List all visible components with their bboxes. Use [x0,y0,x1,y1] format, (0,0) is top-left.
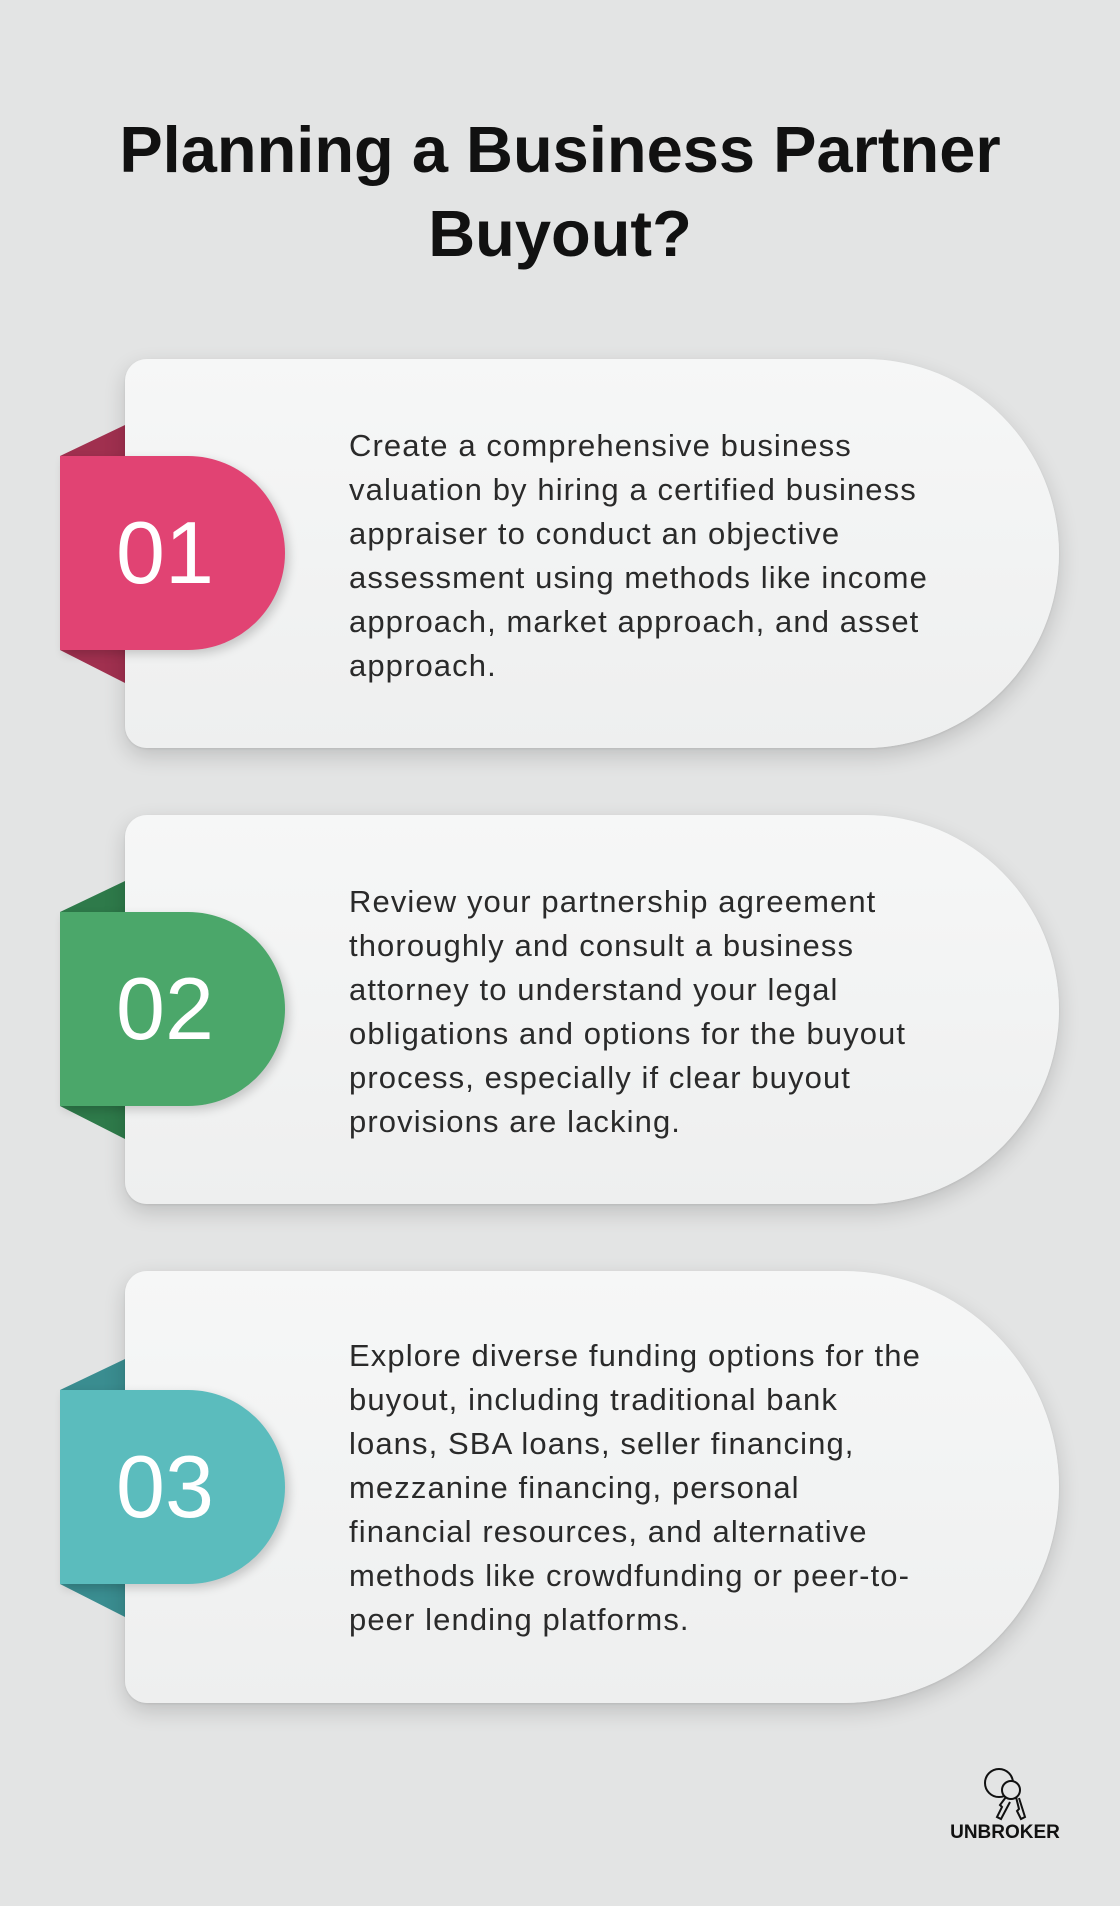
text: step 3: mezzanine financing, personal [349,1470,800,1505]
panel: step 3 [60,1270,1067,1720]
panel: step 2 [60,814,1067,1220]
card: step 3 [125,1271,1059,1703]
text: step 2: obligations and options for the buyout [349,1016,906,1051]
text: step 2: thoroughly and consult a business [349,928,854,963]
icon: keys [984,1768,1026,1820]
logo: unbroker [950,1768,1060,1843]
title: Planning a Business Partner [119,113,1001,186]
badge: 01: 01 [116,503,214,602]
text: step 1: valuation by hiring a certified business [349,472,917,507]
text: step 2: process, especially if clear buyout [349,1060,851,1095]
text: step 3: financial resources, and alternative [349,1514,868,1549]
text: step 3: Explore diverse funding options for the [349,1338,921,1373]
text: step 2 [349,884,906,1139]
text: step 3: peer lending platforms. [349,1602,690,1637]
fold: step 2 [60,881,125,1139]
text: step 1: approach. [349,648,497,683]
badge: 01 [60,456,285,650]
title [119,113,1001,270]
fold: step 3 [60,1359,125,1617]
badge: 03 [60,1390,285,1584]
text: step 1: appraiser to conduct an objective [349,516,840,551]
text: step 1: approach, market approach, and asset [349,604,919,639]
card: step 1 [125,359,1059,748]
fold: step 1 [60,425,125,683]
badge: 03: 03 [116,1437,214,1536]
text: step 2: Review your partnership agreement [349,884,876,919]
brand name: UNBROKER [950,1822,1060,1843]
text: step 1: assessment using methods like income [349,560,928,595]
text: step 3: methods like crowdfunding or peer-to- [349,1558,910,1593]
text: step 2: attorney to understand your legal [349,972,839,1007]
card: step 2 [125,815,1059,1204]
badge: 02 [60,912,285,1106]
text: step 2: provisions are lacking. [349,1104,681,1139]
text: step 1: Create a comprehensive business [349,428,852,463]
title: Buyout? [428,197,692,270]
text: step 3 [349,1338,921,1637]
panel: step 1 [60,358,1067,764]
text: step 3: loans, SBA loans, seller financing, [349,1426,854,1461]
text: step 3: buyout, including traditional bank [349,1382,838,1417]
badge: 02: 02 [116,959,214,1058]
text: step 1 [349,428,928,683]
